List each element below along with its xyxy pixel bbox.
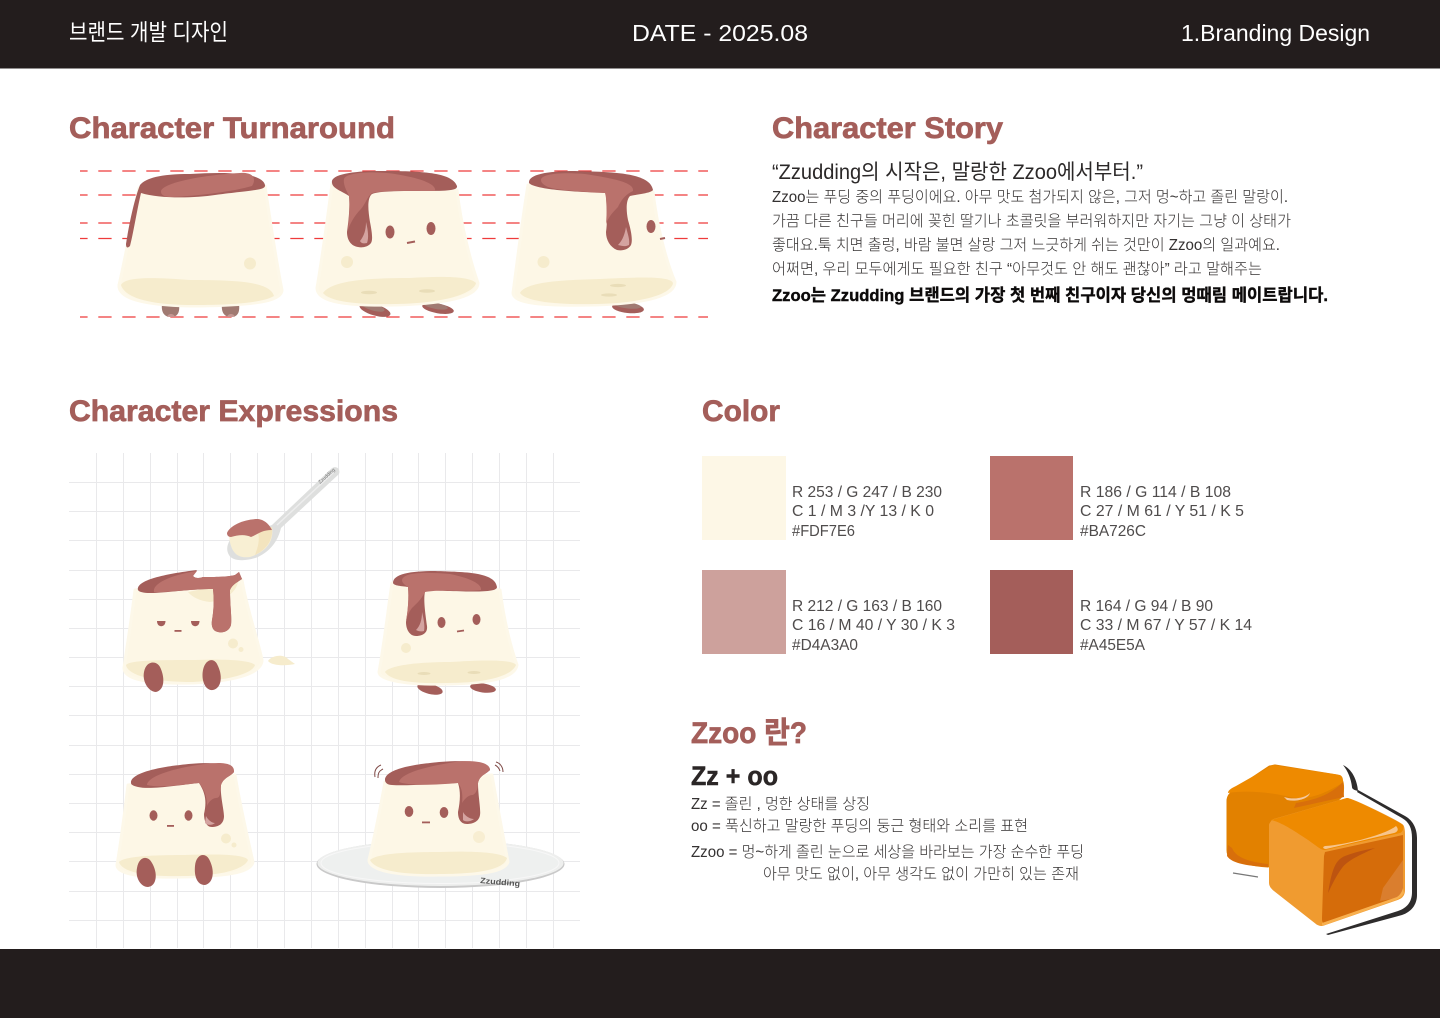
header bar: 브랜드 개발 디자인 [69, 19, 228, 45]
story text block [772, 161, 1328, 305]
heading: Character Expressions: Character Expressions [69, 395, 398, 428]
name explanation: 아무 맛도 없이, 아무 생각도 없이 가만히 있는 존재 [763, 865, 1079, 883]
swatch: caramel: R 186 / G 114 / B 108 [1080, 484, 1231, 501]
swatch: brown: R 164 / G 94 / B 90 [1080, 598, 1213, 615]
crumb [268, 656, 295, 665]
pudding: sitting [117, 763, 253, 887]
spoon with pudding bite [227, 467, 339, 560]
heading: Character Story: Character Story [772, 112, 1003, 145]
story text block: 좋대요.툭 치면 출렁, 바람 불면 살랑 그저 느긋하게 쉬는 것만이 Zzoo의 일과예요. [772, 236, 1280, 254]
back cube [1227, 765, 1344, 867]
pudding: side view left [119, 173, 282, 317]
name explanation [691, 761, 1084, 883]
heading: Character Turnaround: Character Turnaround [69, 112, 395, 145]
story text block: Zzoo는 푸딩 중의 푸딩이에요. 아무 맛도 첨가되지 않은, 그저 멍~하고 졸린 말랑이. [772, 188, 1288, 206]
swatch: pink [702, 570, 955, 654]
name explanation: oo = 푹신하고 말랑한 푸딩의 둥근 형태와 소리를 표현 [691, 817, 1028, 835]
swatch: cream: C 1 / M 3 /Y 13 / K 0 [792, 503, 934, 520]
pudding: three-quarter view [513, 171, 675, 315]
header bar: 1.Branding Design [1181, 20, 1370, 46]
plate: Zzudding [480, 876, 521, 888]
story text block: 가끔 다른 친구들 머리에 꽂힌 딸기나 초콜릿을 부러워하지만 자기는 그냥 이 상태가 [772, 212, 1291, 230]
swatch: cream: R 253 / G 247 / B 230 [792, 484, 942, 501]
swatch: caramel: C 27 / M 61 / Y 51 / K 5 [1080, 503, 1244, 520]
plate [316, 840, 564, 888]
swatch: pink: R 212 / G 163 / B 160 [792, 598, 942, 615]
heading: Zzoo: Zzoo 란? [691, 717, 807, 750]
header bar [0, 0, 1440, 68]
expressions panel [69, 453, 580, 948]
pudding: neutral standing [379, 571, 517, 697]
swatch: cream: #FDF7E6 [792, 523, 855, 540]
icon: caramel cubes sticker [1227, 765, 1417, 935]
heading: Color: Color [702, 395, 780, 428]
swatch: cream [702, 456, 942, 540]
swatch: brown: C 33 / M 67 / Y 57 / K 14 [1080, 617, 1252, 634]
story text block: Zzoo는 Zzudding 브랜드의 가장 첫 번째 친구이자 당신의 멍때림 메이트랍니다. [772, 286, 1328, 305]
swatch: brown: #A45E5A [1080, 637, 1145, 654]
swatch: caramel [990, 456, 1244, 540]
story text block: 어쩌면, 우리 모두에게도 필요한 친구 “아무것도 안 해도 괜찮아” 라고 말해주는 [772, 260, 1262, 278]
name explanation: Zz = 졸린 , 멍한 상태를 상징 [691, 795, 870, 813]
swatch: pink: C 16 / M 40 / Y 30 / K 3 [792, 617, 955, 634]
swatch: brown [990, 570, 1252, 654]
spoon with pudding bite: Zzudding [317, 467, 337, 485]
pudding: front view [317, 171, 478, 320]
motion marks [375, 762, 503, 778]
pudding: wobbling on plate [316, 761, 564, 888]
footer bar [0, 949, 1440, 1018]
front cube [1271, 798, 1404, 926]
name explanation: Zzoo = 멍~하게 졸린 눈으로 세상을 바라보는 가장 순수한 푸딩 [691, 843, 1084, 861]
turnaround panel [80, 171, 708, 320]
story text block: “Zzudding의 시작은, 말랑한 Zzoo에서부터.” [772, 161, 1143, 184]
header bar: DATE - 2025.08 [632, 20, 808, 46]
swatch: caramel: #BA726C [1080, 523, 1146, 540]
name explanation: Zz + oo [691, 761, 778, 791]
swatch: pink: #D4A3A0 [792, 637, 858, 654]
pudding: sleepy with scooped top [124, 570, 262, 692]
